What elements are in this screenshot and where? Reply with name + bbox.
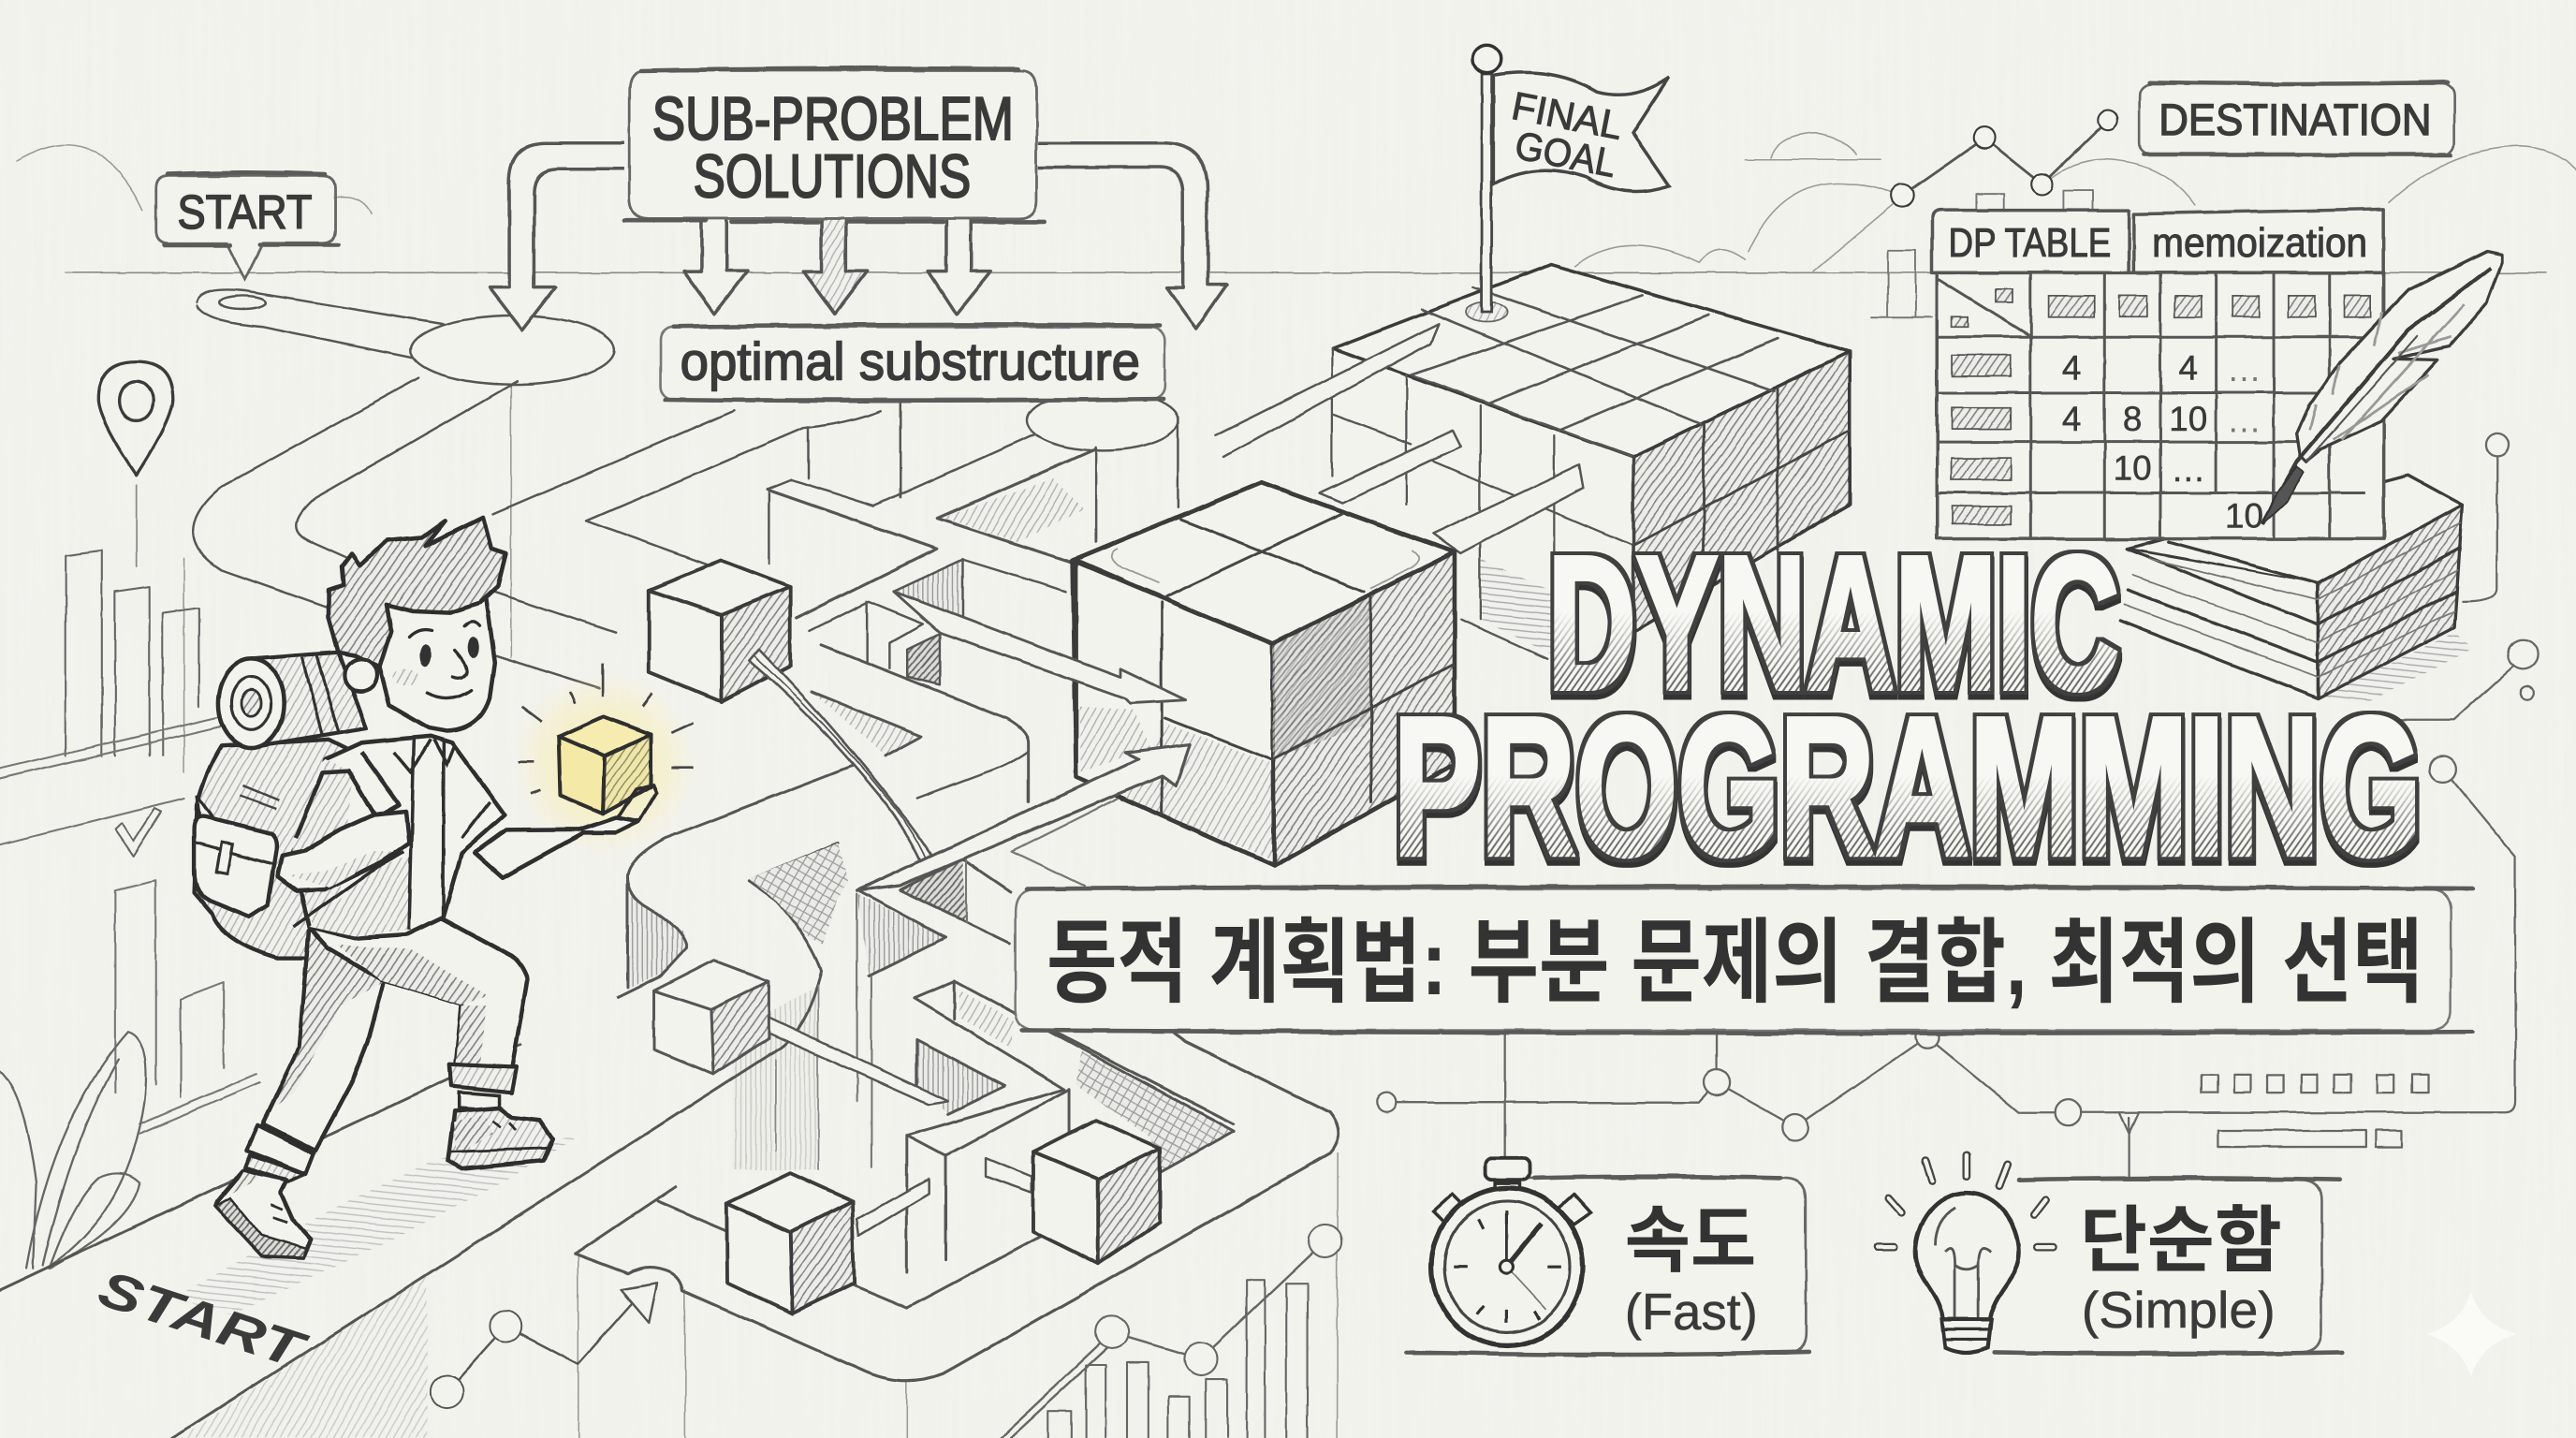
chart: bottom left line with arrow — [431, 1284, 657, 1408]
panel: DP table — [1932, 209, 2385, 539]
arrow: far right — [1038, 143, 1227, 329]
table grid — [1932, 272, 2385, 539]
facial features — [419, 645, 432, 667]
panel outline: simple card — [1995, 1178, 2343, 1354]
arrow: into center cube lower — [857, 744, 1190, 890]
callout text: START: START — [178, 185, 312, 239]
road: lower maze path — [575, 856, 1339, 1381]
icon: light bulb — [1878, 1155, 2054, 1352]
icon: feather quill — [2262, 252, 2502, 524]
cube: lower right cube — [1033, 1120, 1160, 1264]
road: start capsule and junction — [198, 289, 614, 385]
circuit lines: right side — [1377, 433, 2539, 1178]
small background bars behind table — [1871, 191, 2093, 317]
backpack — [194, 740, 394, 958]
cube: lower center cube — [727, 1173, 855, 1313]
flag label: FINAL: FINAL — [1508, 83, 1626, 148]
table numbers: … — [2227, 350, 2261, 389]
heading: SUB-PROBLEM: SUB-PROBLEM — [652, 84, 1014, 153]
ground lines and bars: lower left — [0, 716, 259, 1134]
icon: flag with pole — [1466, 45, 1669, 322]
chart: bottom center bars and line — [1001, 1225, 1341, 1438]
rear leg — [263, 930, 394, 1151]
arrows from sub-problem box — [490, 143, 1227, 330]
right arm holding cube — [475, 818, 639, 877]
cube: middle small cube — [654, 961, 768, 1074]
label: optimal substructure: optimal substructure — [681, 331, 1140, 390]
shirt — [292, 736, 505, 938]
arrow: down 3 — [929, 217, 990, 314]
icon: location pin — [98, 361, 172, 567]
label: speed korean: 속도 — [1625, 1200, 1756, 1281]
hair — [329, 518, 506, 668]
arrow: down 2 — [803, 217, 868, 314]
main title: DYNAMIC: DYNAMIC — [1547, 517, 2119, 729]
big center cube — [1073, 482, 1455, 866]
table numbers: … — [2171, 450, 2205, 489]
table numbers: 4 — [2062, 400, 2081, 438]
road shadow under traveller — [174, 1136, 580, 1314]
rear boot — [215, 1170, 311, 1258]
arrow: down 1 — [683, 217, 748, 314]
table numbers: 10 — [2169, 400, 2207, 438]
light rays — [518, 664, 694, 794]
pack strap — [296, 753, 399, 838]
road: upper winding path — [193, 378, 1178, 801]
watermark sparkle — [2426, 1292, 2517, 1377]
sleeping roll — [252, 653, 366, 746]
golden cube — [559, 716, 651, 814]
road label: START: START — [92, 1259, 315, 1381]
flag label: GOAL: GOAL — [1512, 123, 1620, 185]
big back cube — [1332, 265, 1850, 659]
connector beams between cubes — [748, 1011, 1032, 1236]
front boot — [447, 1108, 552, 1169]
icon: stopwatch — [1432, 1158, 1590, 1345]
backpack pocket — [194, 816, 277, 917]
table numbers: 10 — [2225, 496, 2263, 535]
panel outline: optimal substructure — [661, 325, 1164, 401]
character: traveller — [194, 518, 694, 1258]
panel outline: sub-problem solutions — [624, 68, 1045, 222]
stack of books — [2121, 475, 2472, 703]
face — [379, 592, 494, 731]
line chart: upper right — [1891, 110, 2117, 207]
table header hatches — [1952, 289, 2371, 524]
glow behind golden cube — [513, 672, 696, 856]
heading: SOLUTIONS: SOLUTIONS — [694, 142, 971, 211]
bar chart: upper left — [66, 550, 198, 756]
table numbers: … — [2227, 402, 2261, 440]
table numbers: 4 — [2062, 348, 2081, 387]
road: main walkway and winding edge — [0, 766, 853, 1438]
front leg — [309, 918, 527, 1068]
table numbers: 8 — [2123, 400, 2142, 438]
label: DESTINATION: DESTINATION — [2159, 95, 2432, 145]
table numbers: 4 — [2179, 348, 2198, 387]
icon: check mark — [115, 809, 161, 856]
left arm and fist — [278, 812, 409, 891]
arrow: into center cube upper — [894, 592, 1186, 703]
label: simple korean: 단순함 — [2080, 1200, 2282, 1281]
table numbers — [2062, 348, 2263, 535]
table numbers: 10 — [2114, 448, 2152, 487]
cube: upper small cube — [649, 560, 790, 701]
panel outline: speed card — [1406, 1177, 1808, 1355]
table tab label: memoization: memoization — [2152, 220, 2367, 266]
panel outline: korean subtitle — [1016, 887, 2472, 1034]
arrow: from cube to path — [749, 649, 933, 862]
icon: plant — [0, 1032, 146, 1269]
arrow: far left — [490, 143, 624, 330]
fingers holding cube — [618, 785, 657, 821]
ear — [344, 659, 377, 692]
label: Fast: (Fast) — [1625, 1284, 1758, 1341]
table tab label: DP TABLE: DP TABLE — [1949, 220, 2111, 266]
panel outline: start callout — [156, 172, 339, 279]
panel outline: destination — [2139, 82, 2454, 154]
label: Simple: (Simple) — [2082, 1282, 2276, 1339]
beams from back cube to center cube — [1216, 324, 1584, 553]
